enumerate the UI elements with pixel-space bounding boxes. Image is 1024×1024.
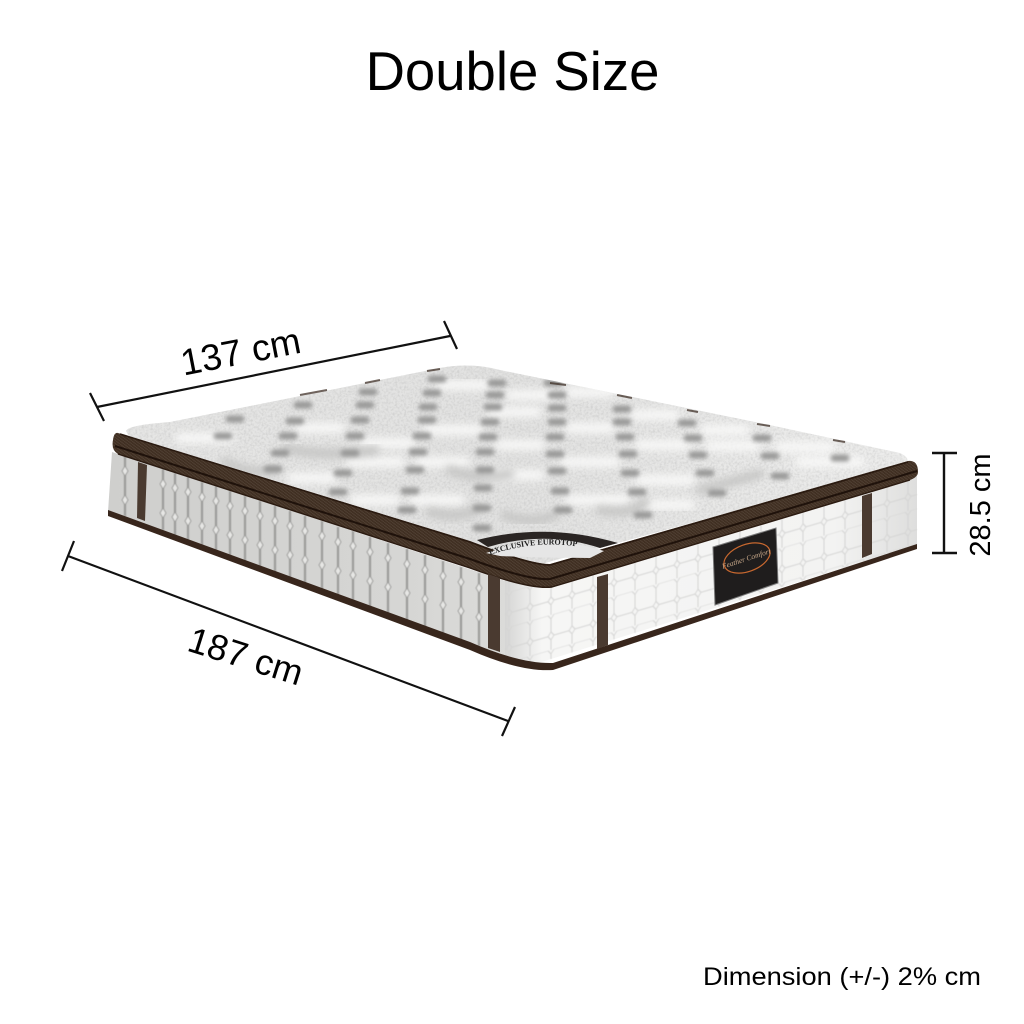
pillow top border band [113,433,918,587]
bottom piping [108,510,917,670]
product label: Feather Comfort [720,546,773,571]
left side panel [108,452,530,666]
smooth white puffs [180,385,860,505]
dimension: height 28.5 cm: 28.5 cm [965,453,997,557]
right side panel [505,476,917,664]
dimension: width 137 cm [90,320,457,421]
mattress [108,366,918,670]
eurotop badge [477,532,618,558]
dimension: height 28.5 cm [932,453,997,557]
dimension: width 137 cm: 137 cm [177,320,304,383]
eurotop badge: EXCLUSIVE EUROTOP [488,539,578,555]
side straps [137,462,872,652]
tolerance note: Dimension (+/-) 2% cm [703,963,981,991]
dimension: length 187 cm: 187 cm [183,619,308,693]
title: Double Size [366,41,659,102]
product label [713,528,778,605]
mattress top surface [120,360,920,570]
tufts [217,379,846,528]
back edge stitches [300,369,845,442]
dimension: length 187 cm [62,541,515,736]
textured dark patches [225,448,760,520]
